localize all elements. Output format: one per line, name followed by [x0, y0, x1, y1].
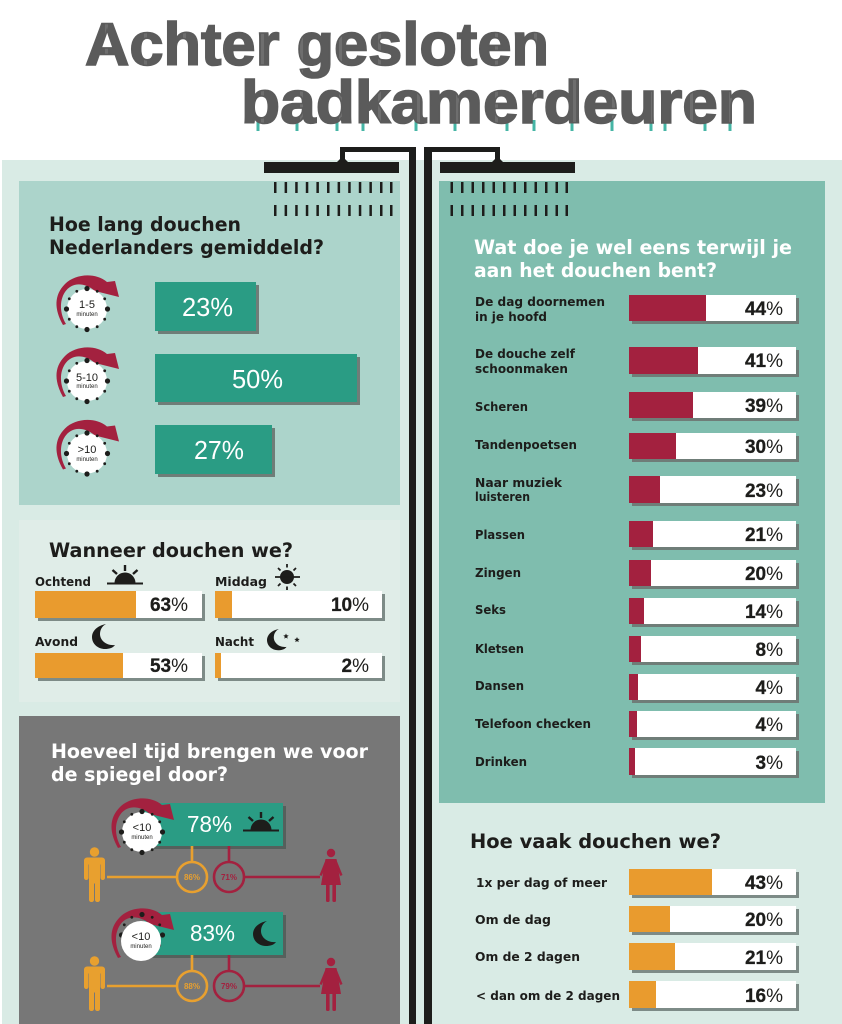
bar: plassen 21%: Plassen — [475, 527, 525, 542]
heading: wat doe je — [474, 236, 792, 282]
bar: dansen 4% — [475, 674, 799, 703]
bar: om de dag 20%: Om de dag — [475, 912, 551, 927]
bar: plassen 21%: 21% — [745, 525, 783, 546]
row: meer dan 10 minuten 27%: >10 — [78, 444, 96, 456]
icon: shower right — [424, 147, 575, 1024]
bar: minder dan om de 2 dagen 16% — [476, 981, 799, 1011]
bar: drinken 3%: 3% — [756, 753, 783, 774]
bar: scheren 39%: 39% — [745, 396, 783, 417]
spiegel row: avond 83%: 79% — [221, 982, 237, 991]
bar: de dag doornemen 44%: in je hoofd — [475, 309, 547, 324]
heading: hoe lang douchen — [49, 213, 324, 259]
spiegel row: ochtend 78%: 78% — [187, 811, 232, 837]
bar: zingen 20%: 20% — [745, 564, 783, 585]
bar: scheren 39%: Scheren — [475, 399, 528, 414]
spiegel row: avond 83%: <10 — [132, 931, 150, 943]
heading: wat doe je: Wat doe je wel eens terwijl je — [474, 236, 792, 259]
bar: 1x per dag of meer 43% — [476, 869, 799, 898]
row: 1-5 minuten 23%: 23% — [182, 292, 233, 322]
row: 5-10 minuten 50%: 50% — [232, 364, 283, 394]
bar: telefoon checken 4%: Telefoon checken — [475, 716, 591, 731]
bar: seks 14% — [475, 598, 799, 627]
bar: plassen 21% — [475, 521, 799, 550]
bar: dansen 4%: 4% — [756, 678, 783, 699]
spiegel row: avond 83% — [84, 908, 342, 1011]
spiegel row: ochtend 78%: minuten — [131, 835, 153, 841]
heading: spiegel — [51, 740, 368, 786]
bar: nacht 2% — [215, 629, 385, 681]
heading: hoe lang douchen: Hoe lang douchen — [49, 213, 241, 236]
bar: om de dag 20% — [475, 906, 799, 935]
bar: tandenpoetsen 30%: Tandenpoetsen — [475, 437, 577, 452]
bar: seks 14%: 14% — [745, 602, 783, 623]
bar: ochtend 63%: 63% — [150, 595, 188, 616]
bar: telefoon checken 4%: 4% — [756, 715, 783, 736]
water drops under title — [256, 120, 732, 131]
bar: naar muziek luisteren 23%: Naar muziek — [475, 475, 563, 490]
heading: wanneer douchen we: Wanneer douchen we? — [49, 539, 293, 562]
heading: hoe vaak douchen we: Hoe vaak douchen we? — [470, 830, 721, 853]
title: badkamerdeuren — [241, 69, 757, 136]
row: meer dan 10 minuten 27% — [56, 420, 275, 477]
bar: de dag doornemen 44%: De dag doornemen — [475, 294, 605, 309]
bar: 1x per dag of meer 43%: 43% — [745, 873, 783, 894]
bar: tandenpoetsen 30% — [475, 433, 799, 462]
bar: naar muziek luisteren 23%: 23% — [745, 481, 783, 502]
bar: naar muziek luisteren 23%: luisteren — [475, 489, 530, 504]
heading: spiegel: Hoeveel tijd brengen we voor — [51, 740, 368, 763]
bar: scheren 39% — [475, 392, 799, 421]
bar: minder dan om de 2 dagen 16%: 16% — [745, 986, 783, 1007]
row: 5-10 minuten 50% — [56, 347, 360, 405]
bar: zingen 20% — [475, 560, 799, 589]
spiegel row: avond 83%: 83% — [190, 920, 235, 946]
icon: shower left — [264, 147, 416, 1024]
bar: de dag doornemen 44% — [475, 294, 799, 324]
spiegel row: ochtend 78%: <10 — [133, 822, 151, 834]
heading: wat doe je: aan het douchen bent? — [474, 259, 717, 282]
bar: avond 53%: Avond — [35, 634, 78, 649]
spiegel row: avond 83%: 88% — [184, 982, 200, 991]
bar: avond 53%: 53% — [150, 656, 188, 677]
bar: nacht 2%: Nacht — [215, 634, 254, 649]
row: meer dan 10 minuten 27%: minuten — [76, 457, 98, 463]
bar: ochtend 63%: Ochtend — [35, 574, 91, 589]
bar: kletsen 8%: Kletsen — [475, 641, 524, 656]
bar: dansen 4%: Dansen — [475, 678, 524, 693]
bar: middag 10%: 10% — [331, 595, 369, 616]
bar: de douche zelf schoonmaken 41%: De douche zelf — [475, 346, 575, 361]
title — [85, 11, 757, 136]
bar: om de 2 dagen 21% — [475, 943, 799, 973]
heading: spiegel: de spiegel door? — [51, 763, 228, 786]
bar: de douche zelf schoonmaken 41%: schoonmaken — [475, 361, 568, 376]
spiegel row: ochtend 78%: 71% — [221, 873, 237, 882]
bar: de dag doornemen 44%: 44% — [745, 299, 783, 320]
bar: tandenpoetsen 30%: 30% — [745, 437, 783, 458]
bar: drinken 3% — [475, 748, 799, 778]
bar: seks 14%: Seks — [475, 602, 506, 617]
bar: kletsen 8%: 8% — [756, 640, 783, 661]
bar: de douche zelf schoonmaken 41%: 41% — [745, 351, 783, 372]
panel: spiegel — [19, 716, 400, 1024]
spiegel row: ochtend 78% — [84, 798, 342, 902]
bar: minder dan om de 2 dagen 16%: < dan om de 2 dagen — [476, 988, 620, 1003]
panel: hoe lang douchen — [19, 181, 400, 505]
bar: telefoon checken 4% — [475, 711, 799, 740]
row: meer dan 10 minuten 27%: 27% — [194, 435, 244, 465]
spiegel row: avond 83%: minuten — [130, 944, 152, 950]
bar: naar muziek luisteren 23% — [475, 475, 799, 506]
title: Achter gesloten — [85, 11, 549, 78]
bar: zingen 20%: Zingen — [475, 565, 521, 580]
row: 1-5 minuten 23%: minuten — [76, 312, 98, 318]
panel: wat doe je — [439, 181, 825, 803]
bar: ochtend 63% — [35, 565, 205, 621]
bar: 1x per dag of meer 43%: 1x per dag of meer — [476, 875, 608, 890]
bar: middag 10%: Middag — [215, 574, 267, 589]
row: 1-5 minuten 23%: 1-5 — [79, 299, 95, 311]
heading: hoe lang douchen: Nederlanders gemiddeld? — [49, 236, 324, 259]
bar: nacht 2%: 2% — [342, 656, 369, 677]
panel: wanneer douchen we — [19, 520, 400, 702]
bar: de douche zelf schoonmaken 41% — [475, 346, 799, 377]
bar: om de 2 dagen 21%: 21% — [745, 948, 783, 969]
row: 5-10 minuten 50%: 5-10 — [76, 372, 98, 384]
spiegel row: ochtend 78%: 86% — [184, 873, 200, 882]
row: 1-5 minuten 23% — [56, 275, 259, 334]
bar: om de dag 20%: 20% — [745, 910, 783, 931]
bar: om de 2 dagen 21%: Om de 2 dagen — [475, 949, 580, 964]
bar: kletsen 8% — [475, 636, 799, 665]
bar: avond 53% — [35, 624, 205, 681]
row: 5-10 minuten 50%: minuten — [76, 384, 98, 390]
bar: drinken 3%: Drinken — [475, 754, 527, 769]
bar: middag 10% — [215, 564, 385, 621]
